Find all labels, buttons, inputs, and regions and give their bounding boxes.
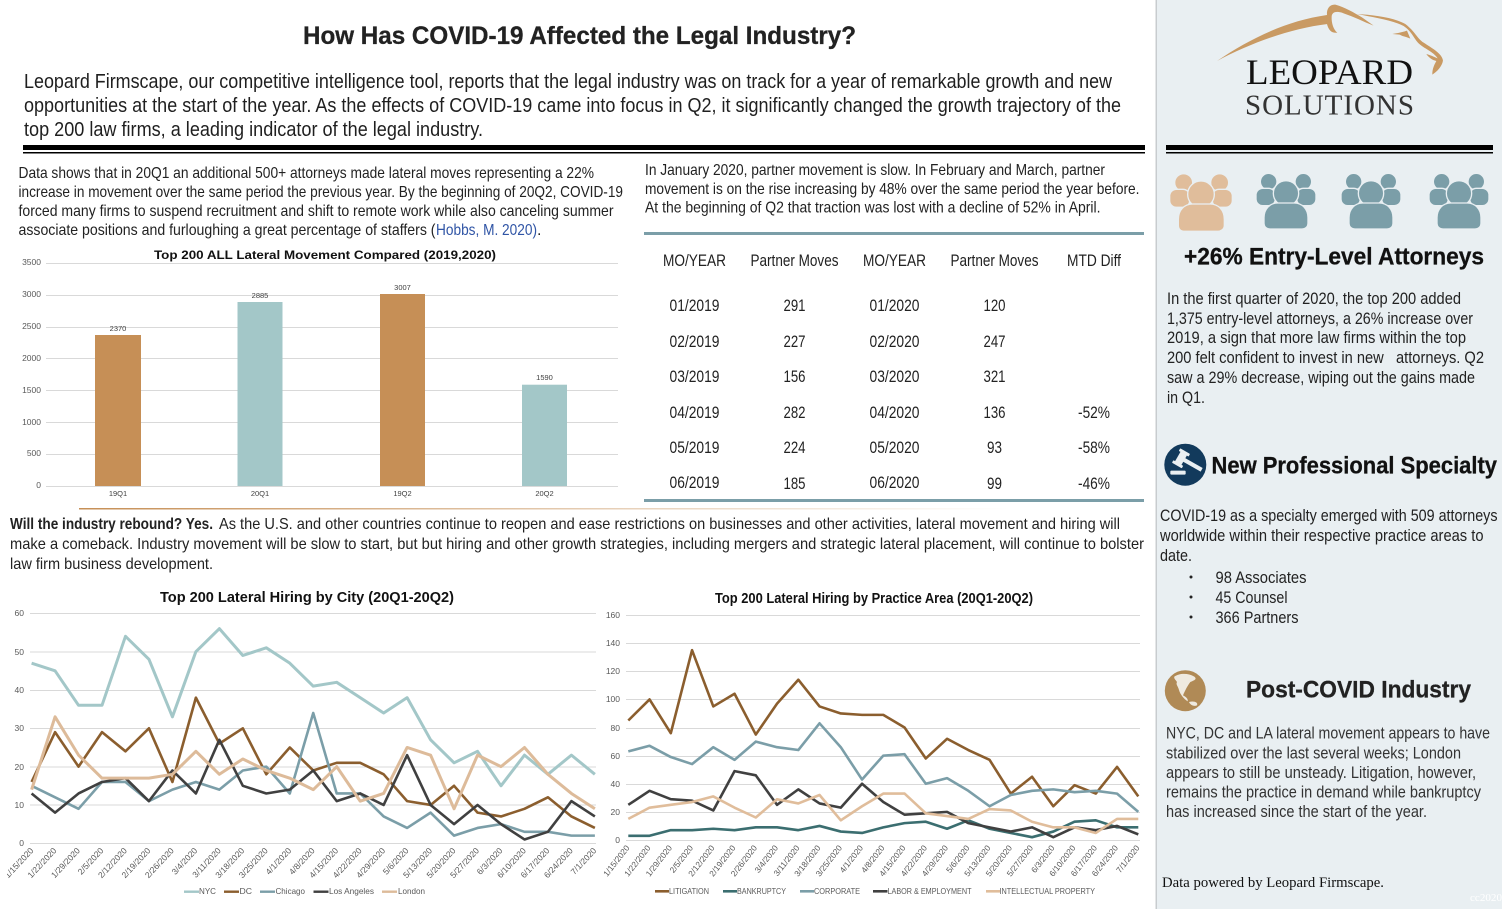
entry-level text block: In the first quarter of 2020, the top 200 added — [1167, 290, 1461, 308]
partner moves table: 321 — [984, 368, 1006, 386]
source note: Data powered by Leopard Firmscape. — [1162, 875, 1384, 891]
city chart date axis: 3/25/2020 — [237, 845, 270, 880]
partner moves table: 01/2019 — [670, 297, 720, 315]
partner moves table: 120 — [984, 297, 1006, 315]
practice chart title: Top 200 Lateral Hiring by Practice Area (20Q1-20Q2) — [715, 591, 1033, 607]
partner moves table: MO/YEAR — [663, 252, 726, 270]
practice chart date axis: 5/13/2020 — [962, 843, 993, 878]
series: London — [32, 717, 595, 809]
city chart legend: Los Angeles — [329, 886, 374, 896]
heading: entry-level attorneys: +26% Entry-Level Attorneys — [1184, 244, 1484, 270]
city chart date axis: 4/15/2020 — [307, 845, 340, 880]
city chart date axis: 5/13/2020 — [401, 845, 434, 880]
partner moves table: Partner Moves — [750, 252, 838, 270]
partner moves table: 185 — [784, 475, 806, 493]
practice chart date axis: 6/10/2020 — [1047, 843, 1078, 878]
practice chart date axis: 2/5/2020 — [667, 843, 695, 875]
post-covid text block: stabilized over the last several weeks; London — [1166, 744, 1461, 762]
heading: post-covid industry: Post-COVID Industry — [1246, 676, 1472, 704]
city chart date axis: 6/10/2020 — [495, 845, 528, 880]
bar chart: top 200 all lateral movement: 3007 — [394, 283, 411, 292]
icon: globe — [1165, 670, 1206, 711]
intro text block: top 200 law firms, a leading indicator of the legal industry. — [24, 119, 483, 141]
specialty text block: date. — [1160, 547, 1192, 565]
practice chart date axis: 4/29/2020 — [919, 843, 950, 878]
specialty text block — [1159, 507, 1498, 627]
rebound text block — [10, 516, 1145, 573]
city chart date axis: 5/6/2020 — [381, 845, 411, 877]
practice chart date axis: 7/1/2020 — [1114, 843, 1142, 875]
city chart date axis: 2/5/2020 — [76, 845, 106, 877]
intro text block: Leopard Firmscape, our competitive intelligence tool, reports that the legal industry was on track for a year of remarkable growth and new — [24, 71, 1112, 93]
panel: sidebar — [1156, 0, 1502, 909]
city chart date axis — [7, 848, 596, 878]
practice chart date axis: 5/20/2020 — [983, 843, 1014, 878]
entry-level text block: in Q1. — [1167, 389, 1205, 407]
city chart date axis: 2/26/2020 — [143, 845, 176, 880]
bar chart: top 200 all lateral movement: 2000 — [22, 353, 41, 363]
series: Litigation — [628, 650, 1138, 806]
city chart date axis: 2/19/2020 — [119, 845, 153, 880]
partner moves table: 04/2019 — [670, 404, 720, 422]
partner moves table: 01/2020 — [870, 297, 920, 315]
specialty bullet list: 98 Associates — [1216, 569, 1306, 587]
logo: Leopard Solutions — [1217, 5, 1443, 122]
partner moves table: 291 — [784, 297, 806, 315]
rebound text block: law firm business development. — [10, 556, 213, 573]
bar chart: top 200 all lateral movement: 3000 — [22, 289, 41, 299]
partner moves table: -46% — [1078, 475, 1110, 493]
practice chart legend: LITIGATION — [669, 886, 709, 896]
city chart title: Top 200 Lateral Hiring by City (20Q1-20Q2) — [160, 590, 454, 606]
lateral moves text block: Data shows that in 20Q1 an additional 500+ attorneys made lateral moves representing a 22% — [18, 165, 594, 182]
city chart date axis: 1/29/2020 — [49, 845, 82, 880]
lateral moves text block: . — [537, 222, 541, 239]
partner moves table: -58% — [1078, 439, 1110, 457]
practice chart date axis: 1/15/2020 — [601, 843, 632, 878]
line chart: lateral hiring by city: 30 — [15, 723, 24, 733]
line chart: lateral hiring by practice area: 0 — [615, 835, 620, 845]
city chart date axis: 4/1/2020 — [263, 845, 293, 877]
line chart: lateral hiring by practice area: 120 — [606, 666, 620, 676]
partner moves table: 06/2020 — [870, 474, 920, 492]
city chart date axis: 2/12/2020 — [96, 845, 129, 880]
city chart date axis: 4/22/2020 — [331, 845, 364, 880]
partner moves table: 282 — [784, 404, 806, 422]
city chart date axis: 3/18/2020 — [213, 845, 246, 880]
practice chart date axis: 1/29/2020 — [643, 843, 674, 878]
intro text block — [24, 71, 1121, 141]
practice chart date axis: 2/12/2020 — [686, 843, 717, 878]
city chart date axis: 6/17/2020 — [518, 845, 552, 880]
entry-level text block: 2019, a sign that more law firms within the top — [1167, 329, 1466, 347]
bar chart: top 200 all lateral movement: 2885 — [252, 291, 268, 300]
partner moves table: 04/2020 — [870, 404, 920, 422]
practice chart date axis: 6/3/2020 — [1029, 843, 1057, 875]
practice chart date axis: 4/8/2020 — [859, 843, 887, 875]
practice chart date axis: 5/27/2020 — [1004, 843, 1035, 878]
bar chart: top 200 all lateral movement: 2370 — [110, 324, 126, 333]
line chart: lateral hiring by practice area: 80 — [611, 723, 620, 733]
bar chart: top 200 all lateral movement: 20Q1 — [251, 489, 269, 498]
city chart legend: London — [398, 886, 425, 896]
practice chart date axis: 3/18/2020 — [792, 843, 823, 878]
partner moves table: 05/2020 — [870, 439, 920, 457]
lateral moves text block: Hobbs, M. 2020) — [436, 222, 537, 239]
copyright mark: cc2020 — [1470, 892, 1502, 904]
practice chart date axis: 6/17/2020 — [1068, 843, 1099, 878]
practice chart legend — [655, 886, 1095, 896]
practice chart legend: INTELLECTUAL PROPERTY — [1000, 886, 1095, 896]
icon: four people groups, one highlighted — [1170, 173, 1489, 231]
series: Labor and Employment — [628, 771, 1138, 837]
line chart: lateral hiring by practice area — [601, 591, 1142, 896]
lateral moves text block: forced many firms to suspend recruitment and shift to remote work while also canceling summer — [18, 203, 614, 220]
city chart legend: DC — [240, 886, 252, 896]
series: Chicago — [32, 713, 595, 836]
city chart legend: Chicago — [276, 886, 305, 896]
partner moves table: 99 — [987, 475, 1002, 493]
partner moves table: 247 — [984, 333, 1006, 351]
partner moves table: 224 — [784, 439, 806, 457]
post-covid text block — [1166, 724, 1490, 821]
partner moves table: 93 — [987, 439, 1002, 457]
rebound text block: As the U.S. and other countries continue to reopen and ease restrictions on businesses and other activities, lateral movement and hiring will — [219, 516, 1120, 533]
partner movement text block — [645, 162, 1140, 216]
line chart: lateral hiring by city: 50 — [15, 647, 24, 657]
city chart date axis: 4/29/2020 — [354, 845, 387, 880]
series: NYC — [32, 629, 595, 786]
partner movement text block: In January 2020, partner movement is slow. In February and March, partner — [645, 162, 1106, 179]
partner moves table: 05/2019 — [670, 439, 720, 457]
partner moves table: -52% — [1078, 404, 1110, 422]
line chart: lateral hiring by city — [2, 590, 599, 896]
city chart legend: NYC — [199, 886, 216, 896]
bar chart: top 200 all lateral movement: 1590 — [536, 373, 553, 382]
bar chart title: Top 200 ALL Lateral Movement Compared (2019,2020) — [154, 250, 496, 262]
partner moves table: 136 — [984, 404, 1006, 422]
logo: Leopard Solutions: LEOPARD — [1246, 52, 1413, 92]
line chart: lateral hiring by city: 40 — [15, 685, 24, 695]
practice chart date axis: 5/6/2020 — [944, 843, 972, 875]
city chart date axis: 5/20/2020 — [424, 845, 458, 880]
lateral moves text block: associate positions and furloughing a great percentage of staffers ( — [18, 222, 436, 239]
partner moves table: 02/2020 — [870, 333, 920, 351]
partner movement text block: At the beginning of Q2 that traction was lost with a decline of 52% in April. — [645, 200, 1100, 216]
line chart: lateral hiring by practice area: 100 — [606, 694, 620, 704]
city chart date axis: 5/27/2020 — [448, 845, 481, 880]
partner moves table: 06/2019 — [670, 474, 720, 492]
line chart: lateral hiring by practice area: 140 — [606, 638, 620, 648]
line chart: lateral hiring by practice area: 160 — [606, 610, 620, 620]
post-covid text block: has increased since the start of the year. — [1166, 803, 1427, 821]
bar chart: top 200 all lateral movement: 3500 — [22, 257, 41, 267]
line chart: lateral hiring by practice area: 40 — [611, 779, 620, 789]
entry-level text block — [1167, 290, 1484, 407]
partner moves table: Partner Moves — [950, 252, 1038, 270]
series: Intellectual Property — [628, 794, 1138, 833]
icon: gavel — [1164, 444, 1206, 486]
city chart legend — [184, 886, 425, 896]
specialty bullet list — [1190, 569, 1306, 627]
practice chart date axis: 2/19/2020 — [707, 843, 738, 878]
series: Los Angeles — [32, 740, 595, 839]
partner moves table: 03/2020 — [870, 368, 920, 386]
line chart: lateral hiring by city: 20 — [15, 762, 24, 772]
practice chart date axis: 4/22/2020 — [898, 843, 929, 878]
partner movement text block: movement is on the rise increasing by 48% over the same period the year before. — [645, 181, 1140, 198]
series: Bankruptcy — [628, 820, 1138, 837]
bar chart: top 200 all lateral movement: 0 — [36, 480, 41, 490]
bar chart: top 200 all lateral movement: 2500 — [22, 321, 41, 331]
practice chart date axis: 3/25/2020 — [813, 843, 844, 878]
bar chart: top 200 all lateral movement — [22, 250, 618, 498]
bar chart: top 200 all lateral movement: 1500 — [22, 385, 41, 395]
practice chart legend: BANKRUPTCY — [737, 886, 786, 896]
practice chart date axis: 3/11/2020 — [771, 843, 802, 878]
partner moves table: MO/YEAR — [863, 252, 926, 270]
practice chart date axis: 3/4/2020 — [752, 843, 780, 875]
title: How Has COVID-19 Affected the Legal Industry? — [303, 22, 856, 50]
city chart date axis: 6/24/2020 — [542, 845, 575, 880]
line chart: lateral hiring by practice area: 60 — [611, 751, 620, 761]
partner moves table: 227 — [784, 333, 806, 351]
rebound text block: make a comeback. Industry movement will be slow to start, but but hiring and other growth strategies, including mergers and strategic lateral placement, will continue to bolster — [10, 536, 1145, 553]
series: Corporate — [628, 723, 1138, 812]
practice chart legend: CORPORATE — [814, 886, 860, 896]
city chart date axis: 6/3/2020 — [475, 845, 505, 877]
bar chart: top 200 all lateral movement: 20Q2 — [535, 489, 554, 498]
bar chart: top 200 all lateral movement: 19Q1 — [109, 489, 127, 498]
practice chart legend: LABOR & EMPLOYMENT — [888, 886, 972, 896]
bar chart: top 200 all lateral movement: 19Q2 — [393, 489, 412, 498]
logo: Leopard Solutions: SOLUTIONS — [1245, 90, 1414, 122]
line chart: lateral hiring by practice area: 20 — [611, 807, 620, 817]
specialty bullet list: 45 Counsel — [1216, 589, 1288, 607]
bar chart: top 200 all lateral movement: 500 — [27, 448, 41, 458]
line chart: lateral hiring by city: 60 — [15, 608, 24, 618]
partner moves table — [644, 232, 1144, 502]
city chart date axis: 7/1/2020 — [568, 845, 599, 877]
partner moves table: 03/2019 — [670, 368, 720, 386]
city chart date axis: 1/22/2020 — [25, 845, 59, 880]
lateral moves text block — [18, 165, 623, 239]
city chart date axis: 4/8/2020 — [287, 845, 317, 877]
line chart: lateral hiring by city: 0 — [19, 838, 24, 848]
bar chart: top 200 all lateral movement: 1000 — [22, 417, 41, 427]
line chart: lateral hiring by city: 10 — [15, 800, 24, 810]
practice chart date axis: 1/22/2020 — [622, 843, 653, 878]
city chart date axis: 3/4/2020 — [169, 845, 200, 877]
intro text block: opportunities at the start of the year. As the effects of COVID-19 came into focus in Q2, it significantly changed the growth trajectory of the — [24, 95, 1121, 117]
rebound text block: Will the industry rebound? Yes. — [10, 516, 213, 533]
practice chart date axis: 6/24/2020 — [1089, 843, 1120, 878]
practice chart date axis — [601, 843, 1142, 878]
city chart date axis: 1/15/2020 — [2, 845, 36, 880]
specialty bullet list: 366 Partners — [1216, 609, 1298, 627]
practice chart date axis: 2/26/2020 — [728, 843, 759, 878]
partner moves table: 02/2019 — [670, 333, 720, 351]
partner moves table: MTD Diff — [1067, 252, 1121, 270]
city chart date axis: 3/11/2020 — [190, 845, 223, 880]
practice chart date axis: 4/15/2020 — [877, 843, 908, 878]
lateral moves text block: increase in movement over the same period the previous year. By the beginning of 20Q2, COVID-19 — [18, 184, 623, 201]
series: DC — [32, 698, 595, 828]
practice chart date axis: 4/1/2020 — [837, 843, 865, 875]
partner moves table: 156 — [784, 368, 806, 386]
